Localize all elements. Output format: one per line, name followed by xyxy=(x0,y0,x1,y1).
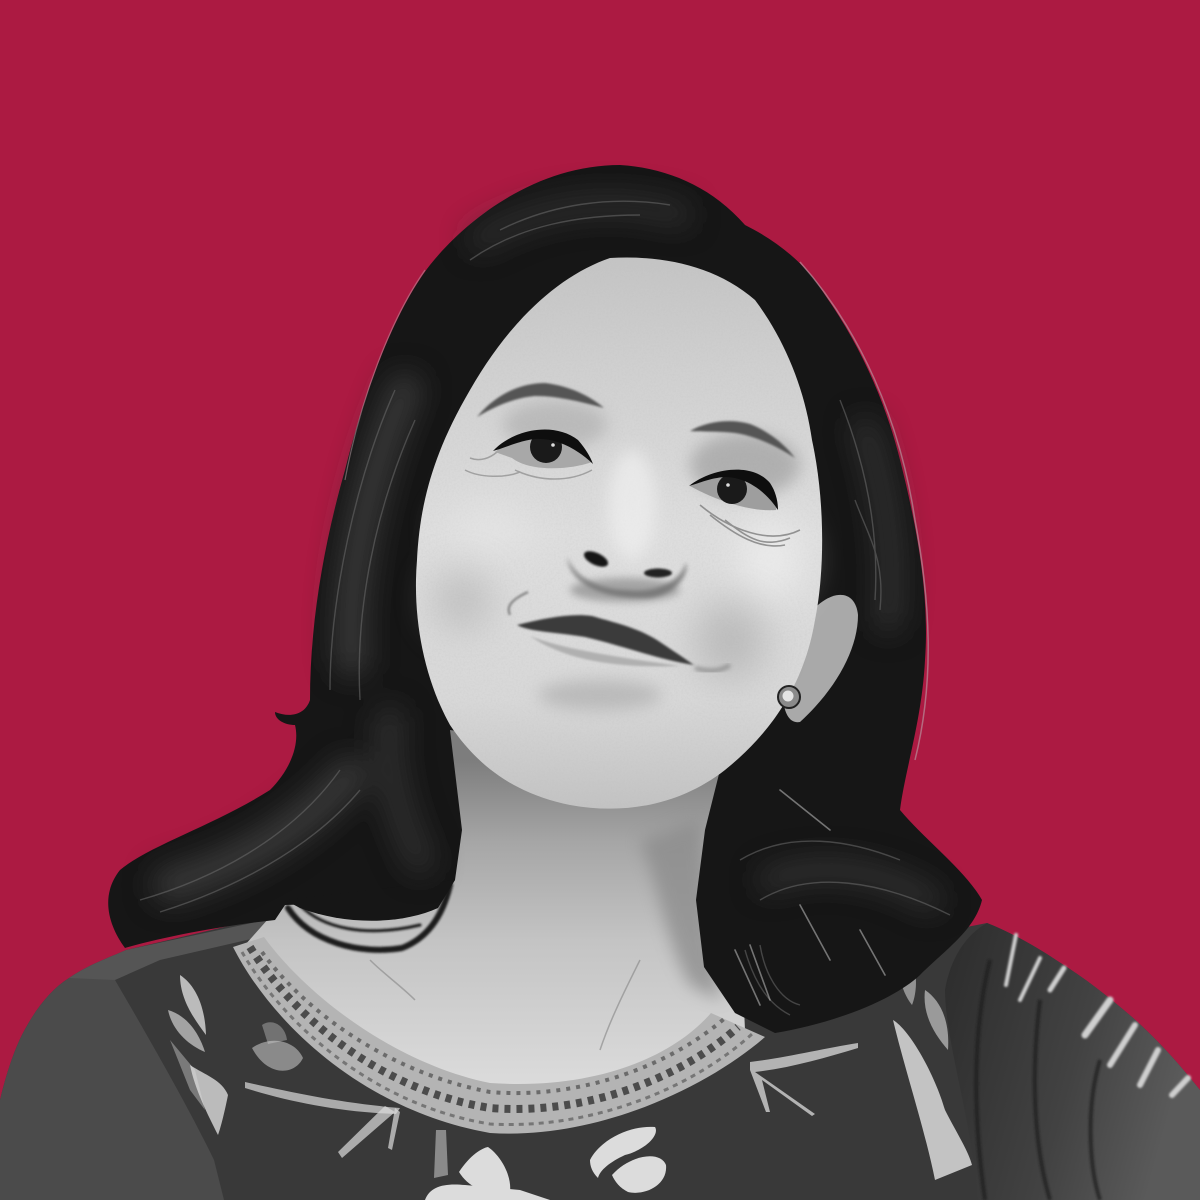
left eyebrow xyxy=(477,383,604,417)
earring xyxy=(778,686,800,708)
stray hair outline xyxy=(800,262,928,760)
neck shadow right xyxy=(640,820,720,1000)
mouth xyxy=(509,592,730,671)
left cheek shadow xyxy=(434,570,490,630)
sleeve highlights xyxy=(1006,935,1188,1095)
right sleeve xyxy=(945,923,1200,1200)
necklace chain pattern xyxy=(242,947,752,1125)
hair fill under wisps xyxy=(285,880,455,921)
small flower xyxy=(252,1041,303,1071)
necklace trim xyxy=(233,937,765,1134)
right cheek shadow xyxy=(694,600,766,680)
left eye xyxy=(493,429,593,468)
nose side shadow xyxy=(570,578,680,602)
lower right hair glints xyxy=(735,790,885,1005)
eye socket right xyxy=(690,433,800,497)
branch right xyxy=(750,1043,858,1116)
flower bud lower xyxy=(612,1156,666,1193)
right eyebrow xyxy=(690,421,795,458)
hair soft sheen xyxy=(170,205,930,900)
nostril right xyxy=(644,568,672,578)
left cheek bright xyxy=(448,502,532,558)
bottom flower petal xyxy=(459,1147,510,1193)
neck and chest skin xyxy=(245,700,745,1106)
left sleeve xyxy=(0,974,224,1200)
eye socket left xyxy=(503,401,607,449)
bottom flower cluster xyxy=(425,1184,550,1200)
nostril left xyxy=(582,548,610,570)
branch twigs left xyxy=(338,1106,400,1158)
sleeve folds xyxy=(976,960,1100,1200)
shoulder seam xyxy=(69,918,290,980)
right cheek bright xyxy=(738,518,802,602)
chin shadow xyxy=(538,680,662,710)
flower bud upper xyxy=(590,1127,656,1178)
vertical stem xyxy=(434,1130,448,1178)
stray hair outline left xyxy=(345,270,425,480)
hair silhouette xyxy=(108,165,982,1033)
shirt body xyxy=(0,915,1200,1200)
neck crease lines xyxy=(370,960,640,1050)
facial shading xyxy=(434,401,802,710)
ear xyxy=(783,595,858,722)
hair strands xyxy=(140,201,950,1015)
skin grain xyxy=(416,257,822,809)
face xyxy=(416,257,822,809)
wrinkles left eye xyxy=(465,452,592,479)
nose xyxy=(567,548,687,598)
hair wisps on chest xyxy=(288,885,450,950)
shirt xyxy=(0,915,1200,1200)
right eye xyxy=(689,470,778,510)
left petals xyxy=(180,975,206,1035)
branch left xyxy=(245,1082,400,1114)
wrinkles right eye xyxy=(700,505,800,546)
floral print xyxy=(168,950,972,1200)
nose bridge highlight xyxy=(608,450,656,560)
right petals xyxy=(893,1020,972,1180)
